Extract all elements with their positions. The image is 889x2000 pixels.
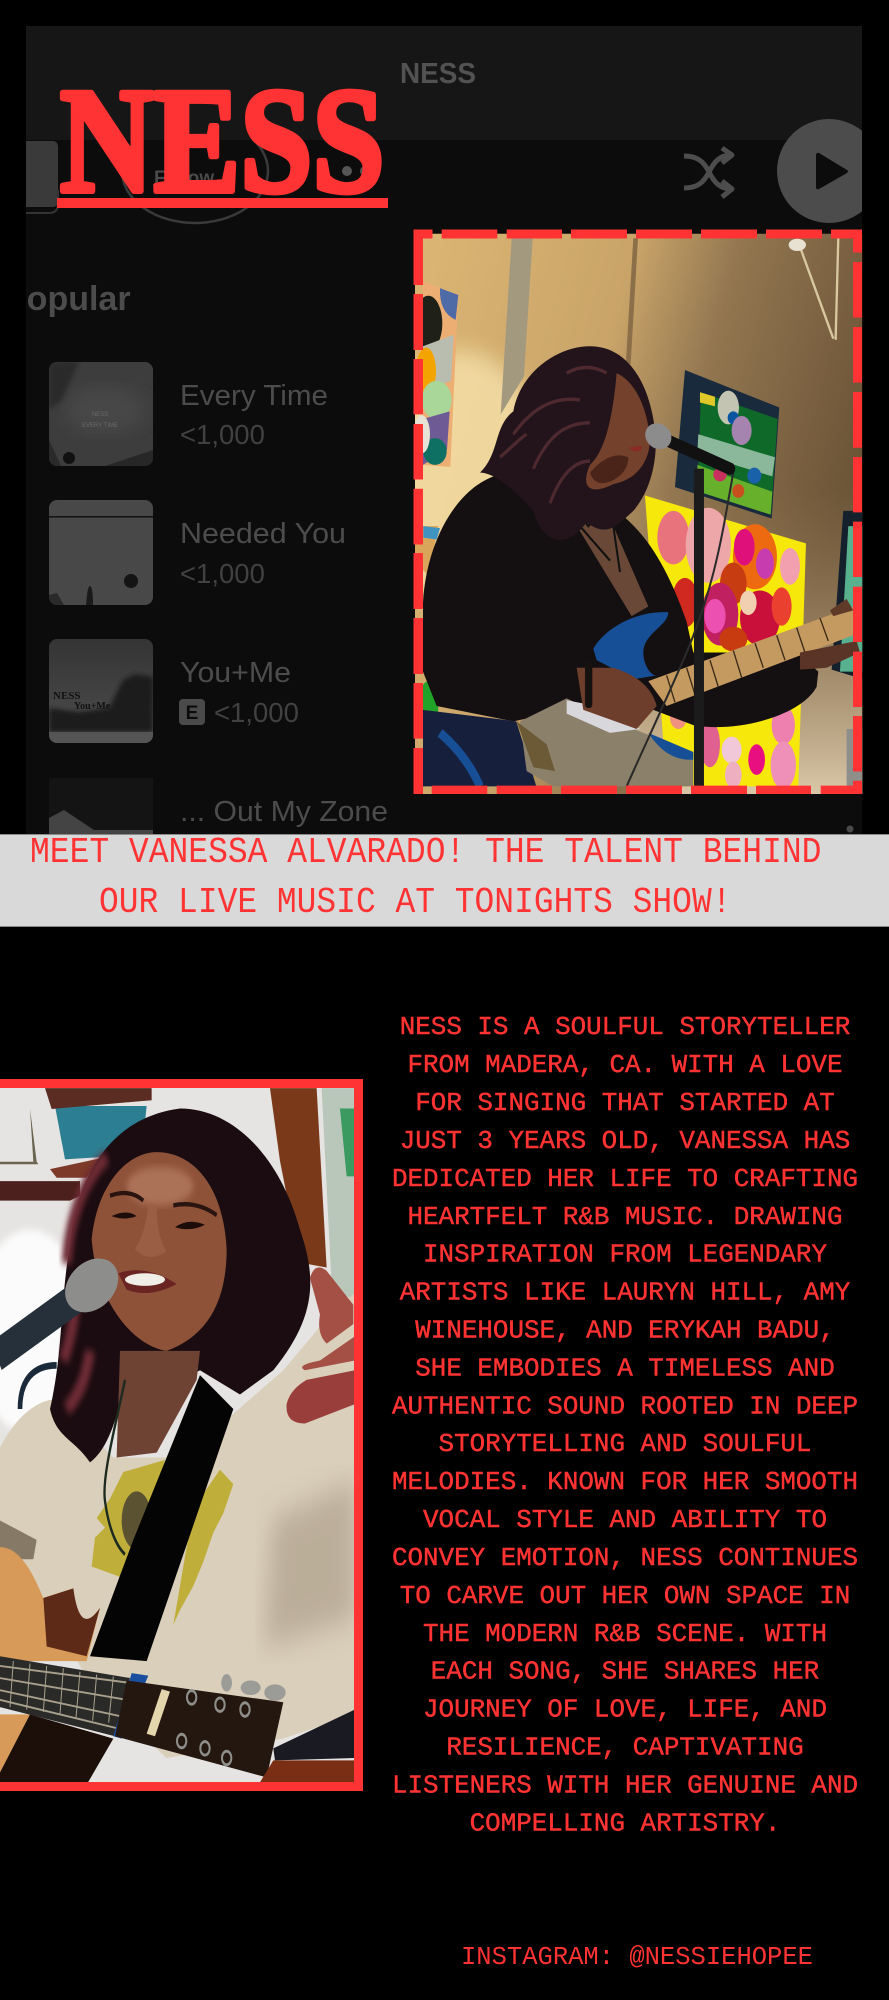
- jeans: [423, 710, 536, 786]
- bio text block: TO CARVE OUT HER OWN SPACE IN: [400, 1581, 850, 1611]
- hair: [480, 346, 656, 540]
- banner text: OUR LIVE MUSIC AT TONIGHTS SHOW!: [99, 883, 731, 923]
- song row: you+me: You+Me: [74, 701, 111, 712]
- bio text block: SHE EMBODIES A TIMELESS AND: [415, 1354, 835, 1384]
- chest and necklaces: [580, 522, 648, 616]
- bio text block: CONVEY EMOTION, NESS CONTINUES: [392, 1543, 858, 1573]
- banner text: MEET VANESSA ALVARADO! THE TALENT BEHIND: [30, 833, 821, 873]
- song row: every time: [49, 362, 328, 466]
- bio text block: HEARTFELT R&B MUSIC. DRAWING: [407, 1202, 843, 1232]
- photo: singer with acoustic guitar: [0, 1084, 355, 1785]
- yellow dotted painting: [645, 496, 806, 789]
- follow button: [121, 140, 270, 224]
- dashed photo frame: [414, 230, 862, 794]
- banner text: [30, 833, 821, 923]
- shirt: [0, 1293, 355, 1758]
- acoustic guitar: [0, 1547, 286, 1785]
- microphone: [642, 419, 730, 469]
- cord: [104, 1380, 125, 1554]
- guitar strap: [90, 1375, 233, 1661]
- bio text block: STORYTELLING AND SOULFUL: [439, 1429, 811, 1459]
- bio text block: COMPELLING ARTISTRY.: [470, 1808, 780, 1838]
- song row: you+me: NESS: [53, 690, 81, 702]
- song row: needed you: <1,000: [180, 558, 265, 589]
- face: [586, 373, 650, 489]
- song row: every time: Every Time: [180, 380, 328, 412]
- photo: singer with electric guitar: [373, 230, 863, 794]
- more menu dots: [342, 166, 362, 176]
- microphone stand and cable: [627, 469, 733, 786]
- song row: every time: NESS: [92, 412, 108, 418]
- song row: you+me: You+Me: [180, 657, 291, 689]
- bio text block: FROM MADERA, CA. WITH A LOVE: [407, 1050, 843, 1080]
- bio text block: WINEHOUSE, AND ERYKAH BADU,: [415, 1316, 835, 1346]
- bio text block: FOR SINGING THAT STARTED AT: [415, 1088, 835, 1118]
- explicit badge: [179, 699, 205, 725]
- microphone: [0, 1249, 123, 1356]
- heading: popular: Popular: [4, 280, 131, 318]
- neck: [117, 1351, 200, 1457]
- bio text block: MELODIES. KNOWN FOR HER SMOOTH: [392, 1467, 858, 1497]
- fretting arm and hands: [577, 599, 860, 729]
- black blouse: [423, 474, 818, 727]
- lamp wire: [800, 238, 838, 340]
- song row: you+me: [49, 639, 299, 743]
- bio text block: AUTHENTIC SOUND ROOTED IN DEEP: [392, 1392, 858, 1422]
- song row: you+me: <1,000: [214, 697, 299, 728]
- electric guitar: [517, 607, 853, 786]
- curtain: [322, 1088, 355, 1301]
- follow button: Follow: [154, 168, 214, 189]
- song row: out my zone: [49, 800, 854, 834]
- hand: [287, 1267, 355, 1424]
- facial features: [110, 1193, 217, 1293]
- title: NESS logo: NESS: [60, 58, 385, 224]
- plant pot: [45, 1088, 152, 1178]
- song row: needed you: Needed You: [180, 518, 346, 550]
- bio text block: EACH SONG, SHE SHARES HER: [431, 1656, 819, 1686]
- bio text block: JOURNEY OF LOVE, LIFE, AND: [423, 1694, 827, 1724]
- song row: every time: <1,000: [180, 419, 265, 450]
- bio text block: RESILIENCE, CAPTIVATING: [446, 1732, 804, 1762]
- panel: dimmed music app background: [4, 26, 881, 834]
- face: [92, 1152, 227, 1351]
- bio text block: NESS IS A SOULFUL STORYTELLER: [400, 1012, 850, 1042]
- sunflower print: [92, 1460, 233, 1625]
- wooden door: [270, 1088, 327, 1267]
- song row: every time: EVERY TIME: [82, 423, 118, 429]
- photo frame: [0, 1084, 358, 1786]
- instagram handle: INSTAGRAM: @NESSIEHOPEE: [461, 1943, 813, 1972]
- jeans at lower right: [273, 1710, 355, 1760]
- song row: out my zone: ... Out My Zone: [180, 796, 388, 828]
- bio text block: LISTENERS WITH HER GENUINE AND: [392, 1770, 858, 1800]
- explicit badge: E: [186, 703, 198, 724]
- shelf: [0, 1181, 80, 1201]
- icon: play button: [777, 119, 862, 223]
- app header artist name: NESS: [400, 58, 476, 90]
- bio text block: DEDICATED HER LIFE TO CRAFTING: [392, 1164, 858, 1194]
- right wall painting: [832, 511, 863, 679]
- bio text block: VOCAL STYLE AND ABILITY TO: [423, 1505, 827, 1535]
- song row: needed you: [49, 500, 346, 605]
- green wall painting: [675, 370, 779, 519]
- bio text block: [392, 1012, 858, 1838]
- bio text block: INSPIRATION FROM LEGENDARY: [423, 1240, 827, 1270]
- wall frame: [0, 1108, 38, 1164]
- icon: shuffle: [684, 148, 732, 197]
- hair: [50, 1108, 310, 1462]
- bio text block: THE MODERN R&B SCENE. WITH: [423, 1619, 827, 1649]
- banner: [0, 833, 889, 927]
- bio text block: JUST 3 YEARS OLD, VANESSA HAS: [400, 1126, 850, 1156]
- left wall painting: [413, 281, 458, 467]
- artist album thumbnail: [26, 141, 59, 214]
- bio text block: ARTISTS LIKE LAURYN HILL, AMY: [400, 1278, 851, 1308]
